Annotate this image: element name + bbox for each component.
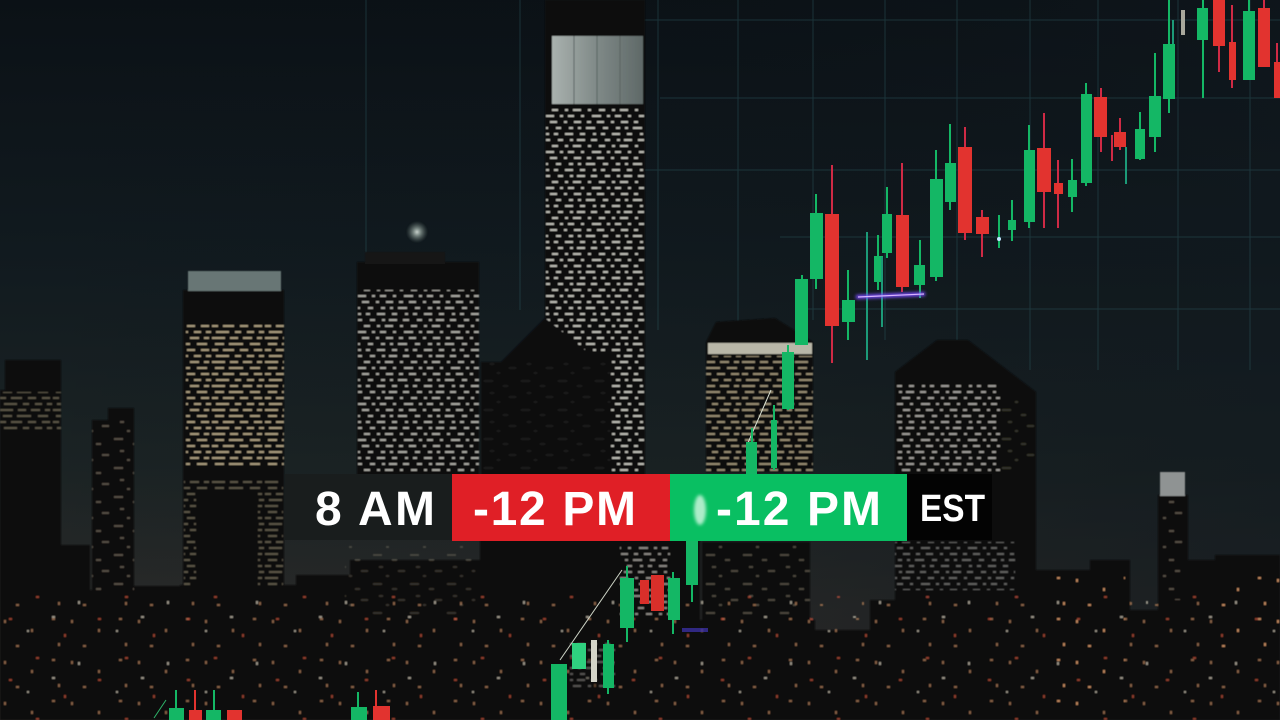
banner segment: red -12 PM <box>452 474 670 541</box>
pale candle <box>1181 10 1185 35</box>
red candles <box>825 0 1280 363</box>
building: central skyscraper with glass crown <box>545 0 645 480</box>
banner segment: green -12 PM <box>670 474 907 541</box>
banner segment: 8 AM: 8 AM <box>315 483 435 536</box>
building: distant spire <box>1158 472 1188 615</box>
building: far left tower <box>0 360 61 600</box>
building: rounded tower right of centre <box>702 318 813 622</box>
city foreground silhouette <box>0 430 1280 720</box>
building: pyramid roof tower <box>895 340 1036 600</box>
neon signal line: blue <box>958 237 1004 241</box>
building: dark tower with beacon <box>357 221 479 482</box>
candlesticks below banner <box>551 541 708 720</box>
building: domed tower <box>481 318 610 600</box>
candlesticks descending behind banner <box>746 345 794 474</box>
small candlesticks along bottom edge <box>154 690 390 720</box>
banner segment: red -12 PM: -12 PM <box>473 483 636 536</box>
time banner <box>285 474 992 541</box>
chart grid lines <box>366 0 1280 370</box>
neon signal line: violet <box>856 294 925 297</box>
green candles <box>795 0 1255 345</box>
city lights <box>0 545 1280 720</box>
banner segment: EST: EST <box>920 488 985 530</box>
candlestick chart: rising upper section <box>795 0 1280 363</box>
banner segment: 8 AM <box>285 474 452 540</box>
banner segment: green -12 PM: -12 PM <box>716 483 881 536</box>
thin green wicks <box>867 20 1173 360</box>
banner segment: EST <box>907 474 992 540</box>
building: cylinder tower with lit cap <box>183 271 284 600</box>
building: narrow tower <box>92 408 134 600</box>
